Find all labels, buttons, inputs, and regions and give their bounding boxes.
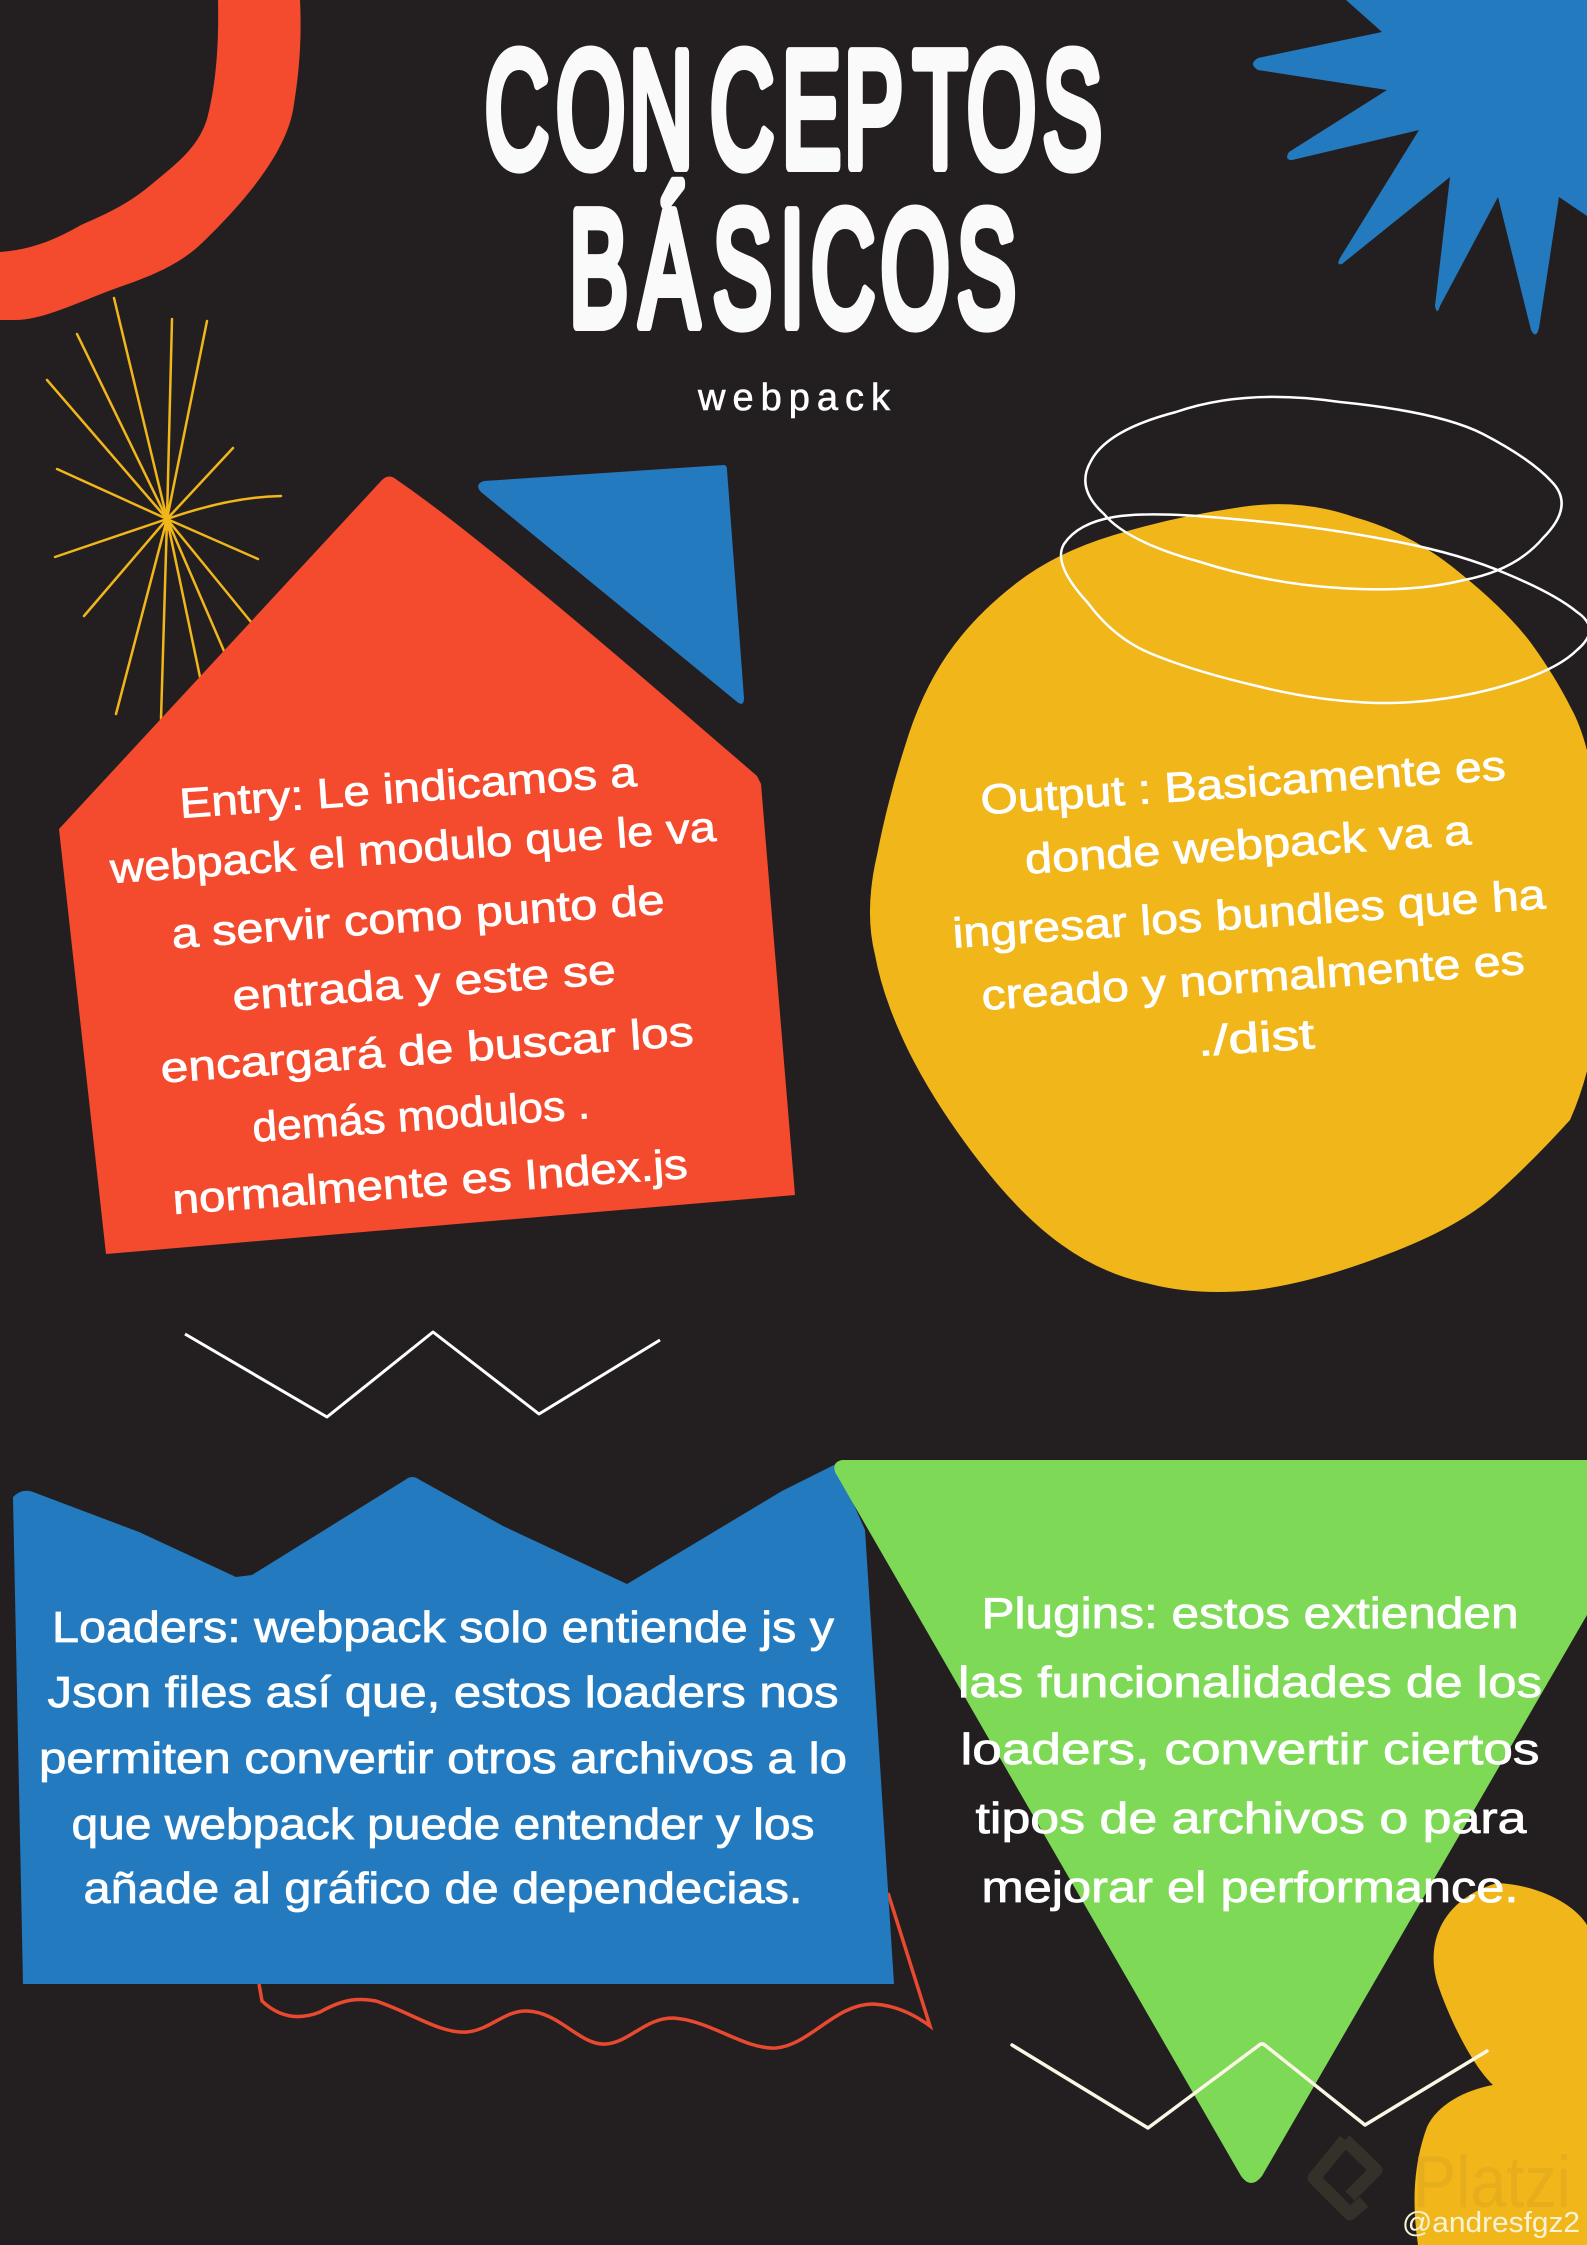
platzi watermark xyxy=(1314,2140,1571,2223)
plugins text: Plugins: estos extienden xyxy=(982,1589,1518,1638)
blue triangle xyxy=(478,465,744,704)
platzi wordmark: Platzi xyxy=(1413,2142,1571,2223)
blue star xyxy=(1253,0,1587,335)
entry text: encargará de buscar los xyxy=(159,1007,695,1092)
title line 1: CONCEPTOS xyxy=(485,18,1102,201)
title line 2: BÁSICOS xyxy=(569,177,1016,360)
subtitle: webpack xyxy=(697,377,891,419)
output text: ./dist xyxy=(1196,1010,1316,1065)
plugins text xyxy=(958,1589,1542,1912)
loaders text xyxy=(39,1603,847,1913)
panel: output blob xyxy=(870,504,1587,1292)
entry text: demás modulos . xyxy=(251,1080,591,1151)
panel: entry house xyxy=(59,476,795,1254)
title xyxy=(485,18,1102,360)
house shape xyxy=(59,476,795,1254)
entry text xyxy=(107,748,718,1223)
decorative yellow sparkle xyxy=(47,298,281,719)
loaders text: añade al gráfico de dependecias. xyxy=(84,1864,802,1913)
blue zigzag banner xyxy=(13,1464,894,1984)
yellow corner blob xyxy=(1415,1883,1587,2245)
entry text: a servir como punto de xyxy=(170,876,666,957)
loaders text: que webpack puede entender y los xyxy=(72,1800,815,1849)
loaders text: Loaders: webpack solo entiende js y xyxy=(52,1603,834,1652)
white scribble ovals xyxy=(1061,397,1587,703)
author handle: @andresfgz2 xyxy=(1402,2207,1580,2239)
red ring shape xyxy=(0,0,301,320)
output text: donde webpack va a xyxy=(1023,806,1473,883)
decorative zigzag bottom xyxy=(1012,2044,1487,2128)
panel: loaders xyxy=(13,1464,894,1984)
yellow blob xyxy=(870,504,1587,1292)
plugins text: las funcionalidades de los xyxy=(958,1658,1542,1707)
entry text: entrada y este se xyxy=(231,946,617,1019)
red wave outline xyxy=(259,1893,930,2048)
output text: creado y normalmente es xyxy=(980,936,1526,1019)
output text: ingresar los bundles que ha xyxy=(951,870,1548,957)
entry text: normalmente es Index.js xyxy=(171,1140,689,1223)
loaders text: Json files así que, estos loaders nos xyxy=(48,1668,839,1717)
icon: platzi logo xyxy=(1314,2140,1376,2214)
loaders text: permiten convertir otros archivos a lo xyxy=(39,1734,847,1783)
output text xyxy=(951,742,1548,1065)
decorative zigzag top xyxy=(185,1332,660,1417)
panel: plugins xyxy=(834,1460,1587,2245)
green triangle xyxy=(834,1460,1587,2183)
plugins text: tipos de archivos o para xyxy=(976,1794,1527,1843)
output text: Output : Basicamente es xyxy=(979,742,1507,823)
plugins text: loaders, convertir ciertos xyxy=(960,1725,1540,1774)
entry text: webpack el modulo que le va xyxy=(107,803,718,892)
entry text: Entry: Le indicamos a xyxy=(178,748,639,827)
plugins text: mejorar el performance. xyxy=(982,1863,1518,1912)
